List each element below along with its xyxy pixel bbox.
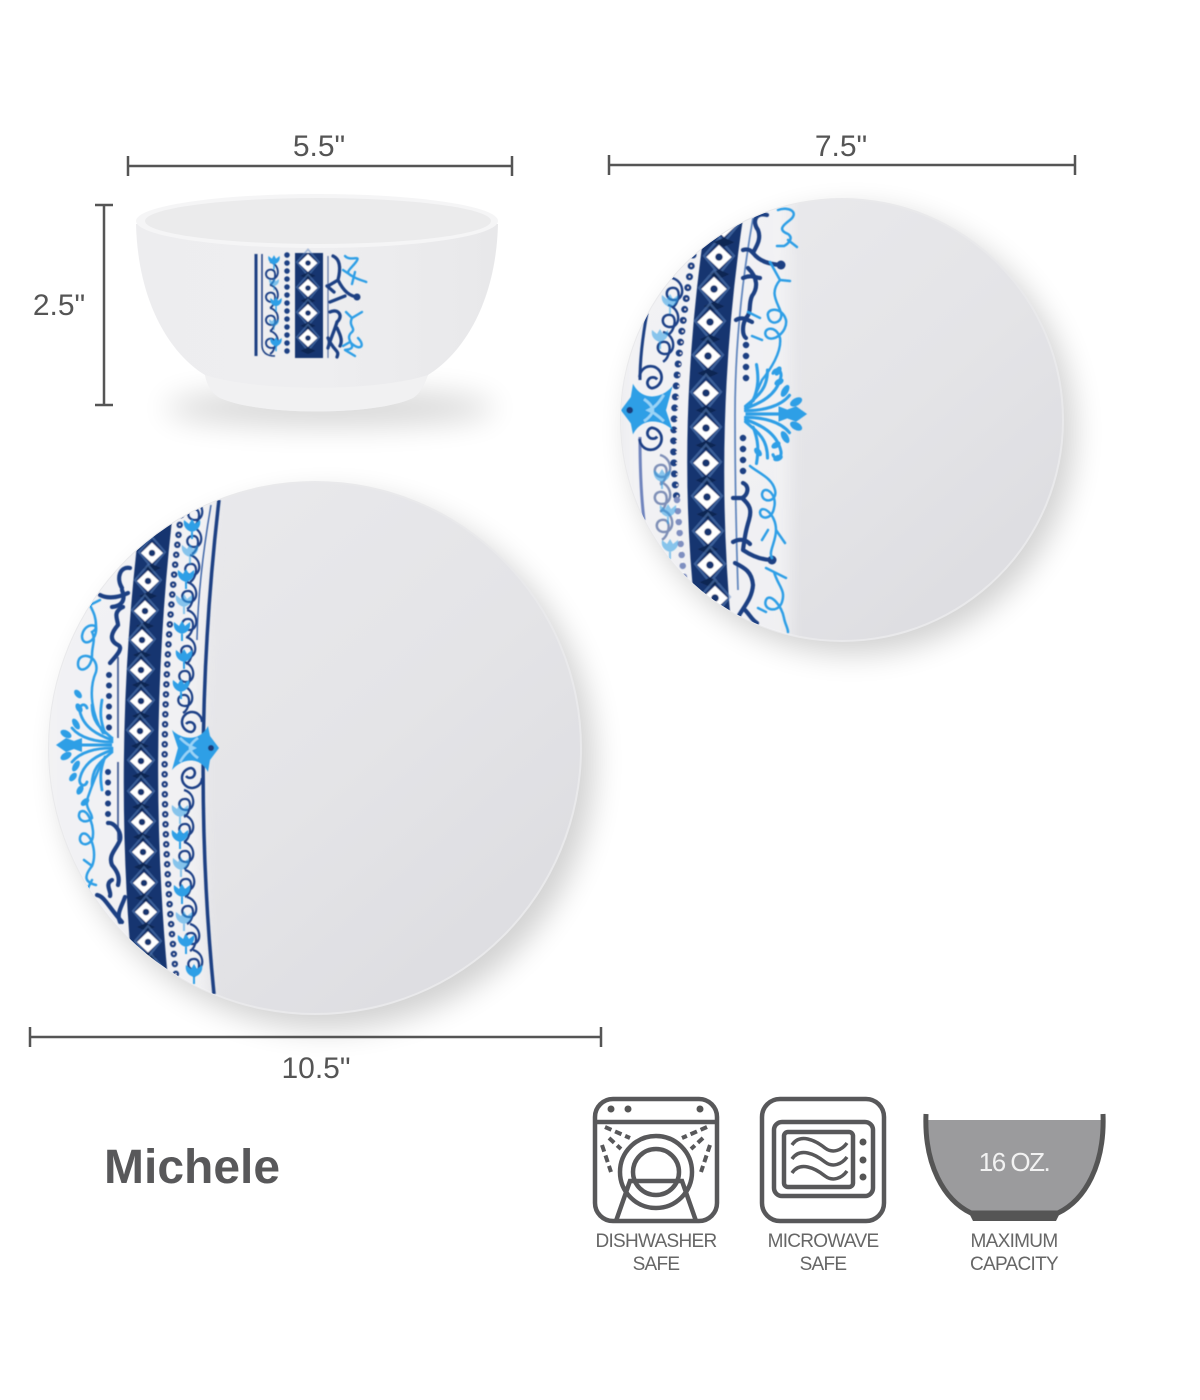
icon: maximum capacity bowl: 16 OZ.: [979, 1147, 1049, 1177]
icon: maximum capacity bowl: CAPACITY: [970, 1254, 1059, 1275]
icon: maximum capacity bowl: [926, 1114, 1103, 1275]
dimension: bowl width 5.5: [128, 130, 512, 176]
icon: dishwasher safe: DISHWASHER: [595, 1231, 717, 1252]
dimension: bowl width 5.5: 5.5": [293, 130, 345, 163]
icon: microwave safe: MICROWAVE: [768, 1231, 878, 1252]
large plate: [40, 480, 594, 1029]
large plate pattern: [40, 480, 219, 1010]
dimension: small plate width 7.5: 7.5": [815, 130, 867, 163]
bowl pattern: [256, 249, 366, 358]
small plate: [620, 190, 1074, 654]
icon: dishwasher safe: [595, 1099, 717, 1275]
bowl: [136, 194, 498, 426]
dimension: bowl height 2.5: 2.5": [33, 289, 85, 322]
dimension: large plate width 10.5: [30, 1027, 601, 1085]
icon: microwave safe: [762, 1099, 884, 1275]
icon: microwave safe: SAFE: [800, 1254, 846, 1275]
dimension: small plate width 7.5: [609, 130, 1075, 175]
dimension: bowl height 2.5: [33, 205, 113, 405]
small plate pattern: [620, 190, 807, 650]
dimension: large plate width 10.5: 10.5": [281, 1052, 351, 1085]
icon: dishwasher safe: SAFE: [633, 1254, 679, 1275]
icon: maximum capacity bowl: MAXIMUM: [971, 1231, 1057, 1252]
title: Michele: Michele: [104, 1141, 280, 1194]
